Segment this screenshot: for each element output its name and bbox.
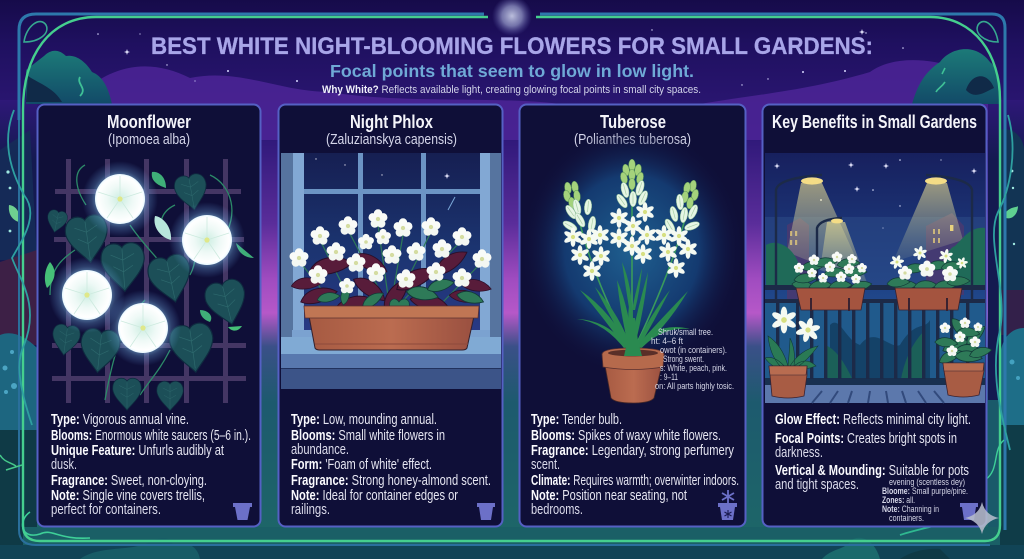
- moonflower heading: [107, 111, 191, 148]
- tuberose illustration: [520, 125, 744, 403]
- night phlox facts: Fragrance: Strong honey-almond scent.: [291, 473, 491, 489]
- icon: snowflake and pot: [718, 490, 737, 520]
- panel: tuberose: [520, 104, 746, 526]
- moonflower heading: (Ipomoea alba): [108, 132, 190, 148]
- panel: key benefits: [762, 104, 993, 526]
- tuberose facts: Type: Tender bulb.: [531, 412, 622, 428]
- stray small text: Strong swent.: [663, 354, 704, 364]
- moonflower facts: Blooms: Enormous white saucers (5–6 in.).: [51, 428, 251, 444]
- stray small text: ht: 4–6 ft: [651, 336, 683, 346]
- night phlox facts: railings.: [291, 502, 330, 518]
- below railing background: [765, 301, 985, 385]
- stray small text: owot (in containers).: [660, 345, 727, 355]
- icon: pot: [233, 503, 252, 520]
- stray small text: evening (scentless dey): [889, 477, 965, 487]
- bushes: [766, 228, 985, 290]
- stray small text: on: All parts highly tosic.: [655, 381, 734, 391]
- tuberose facts: [531, 412, 739, 518]
- deck: [765, 385, 985, 403]
- moonflower facts: perfect for containers.: [51, 502, 161, 518]
- tuberose facts: Note: Position near seating, not: [531, 488, 687, 504]
- night phlox facts: Type: Low, mounding annual.: [291, 412, 437, 428]
- icon: sparkle watermark: [965, 502, 999, 534]
- key benefits facts: and tight spaces.: [775, 477, 859, 493]
- green and white buds: [561, 159, 701, 235]
- vines: [50, 165, 232, 400]
- moonflower facts: Type: Vigorous annual vine.: [51, 412, 189, 428]
- stray small text: Zones: all.: [882, 495, 915, 505]
- terracotta pot: [602, 318, 664, 403]
- why white note: Why White? Reflects available light, creating glowing focal points in small city spaces.: [322, 84, 701, 96]
- planter: [304, 306, 479, 350]
- lamp posts: [776, 175, 972, 385]
- night phlox facts: Form: 'Foam of white' effect.: [291, 457, 432, 473]
- moonflower facts: dusk.: [51, 457, 77, 473]
- moonflower blooms: [49, 161, 245, 366]
- stray small text: Note: Channing in: [882, 504, 939, 514]
- stems: [300, 225, 482, 310]
- tuberose facts: Climate: Requires warmth; overwinter indoors.: [531, 473, 739, 489]
- white phlox blooms: [290, 209, 491, 293]
- title: BEST WHITE NIGHT-BLOOMING FLOWERS FOR SMALL GARDENS:: [151, 33, 873, 60]
- moonflower facts: Note: Single vine covers trellis,: [51, 488, 205, 504]
- night phlox heading: (Zaluzianskya capensis): [326, 132, 457, 148]
- trellis: [52, 159, 246, 403]
- panel: night phlox: [278, 104, 502, 526]
- stars: [97, 29, 904, 86]
- light beams: [787, 183, 963, 285]
- stems: [578, 190, 686, 352]
- bush: top left: [26, 51, 112, 104]
- window sky: [281, 153, 500, 343]
- sky: [765, 153, 985, 403]
- key benefits facts: Glow Effect: Reflects minimal city light.: [775, 412, 971, 428]
- icon: pot: [477, 503, 495, 520]
- key benefits facts: Vertical & Mounding: Suitable for pots: [775, 463, 969, 479]
- tuberose heading: [574, 111, 691, 148]
- left potted lily: [765, 307, 823, 398]
- stray small text: [651, 327, 734, 391]
- window frame: [281, 153, 501, 343]
- key benefits facts: [775, 412, 971, 493]
- moonflower facts: Unique Feature: Unfurls audibly at: [51, 443, 224, 459]
- blades: [577, 262, 690, 352]
- lamp glows: [801, 177, 947, 223]
- moonflower facts: [51, 412, 251, 518]
- icon: pot: [960, 503, 978, 520]
- foliage: bottom: [0, 527, 1024, 559]
- balcony illustration: [765, 153, 993, 403]
- tuberose heading: (Polianthes tuberosa): [574, 132, 691, 148]
- night phlox heading: Night Phlox: [350, 111, 434, 132]
- night phlox facts: Note: Ideal for container edges or: [291, 488, 458, 504]
- moon: [492, 0, 532, 36]
- hanging planters with flowers: [791, 245, 970, 311]
- moonflower trellis illustration: [45, 159, 254, 411]
- tuberose facts: bedrooms.: [531, 502, 583, 518]
- stray small text: : 9–11: [660, 372, 678, 382]
- tuberose facts: Fragrance: Legendary, strong perfumery: [531, 443, 735, 459]
- leaves: [291, 247, 493, 319]
- heart leaves: [45, 172, 254, 411]
- moonflower heading: Moonflower: [107, 111, 191, 132]
- stray small text: Shruk/small tree.: [658, 327, 713, 337]
- tuberose heading: Tuberose: [600, 111, 666, 132]
- stray small text: containers.: [889, 513, 924, 523]
- skyline buildings: [765, 213, 985, 300]
- purple clouds: [70, 60, 1000, 140]
- blue glow: [520, 125, 744, 375]
- stray small text: [882, 477, 968, 523]
- subtitle: Focal points that seem to glow in low light.: [330, 61, 694, 81]
- tuberose facts: scent.: [531, 457, 560, 473]
- tuberose facts: Blooms: Spikes of waxy white flowers.: [531, 428, 721, 444]
- stray small text: Bloome: Small purple/pine.: [882, 486, 968, 496]
- moonflower facts: Fragrance: Sweet, non-cloying.: [51, 473, 207, 489]
- bush: top right: [912, 49, 1001, 104]
- night phlox facts: abundance.: [291, 442, 349, 458]
- stray small text: s: White, peach, pink.: [660, 363, 727, 373]
- panel: moonflower: [38, 104, 260, 526]
- foliage: right side: [988, 100, 1024, 559]
- key benefits facts: darkness.: [775, 445, 823, 461]
- window sill: [281, 337, 501, 389]
- right potted flowers: [934, 315, 993, 397]
- foliage: left side: [0, 100, 37, 559]
- night phlox heading: [326, 111, 457, 148]
- night phlox facts: Blooms: Small white flowers in: [291, 428, 445, 444]
- window box illustration: [281, 153, 501, 389]
- white star blooms: [563, 202, 698, 281]
- night phlox facts: [291, 412, 491, 518]
- key benefits facts: Focal Points: Creates bright spots in: [775, 431, 957, 447]
- railing: [765, 285, 985, 385]
